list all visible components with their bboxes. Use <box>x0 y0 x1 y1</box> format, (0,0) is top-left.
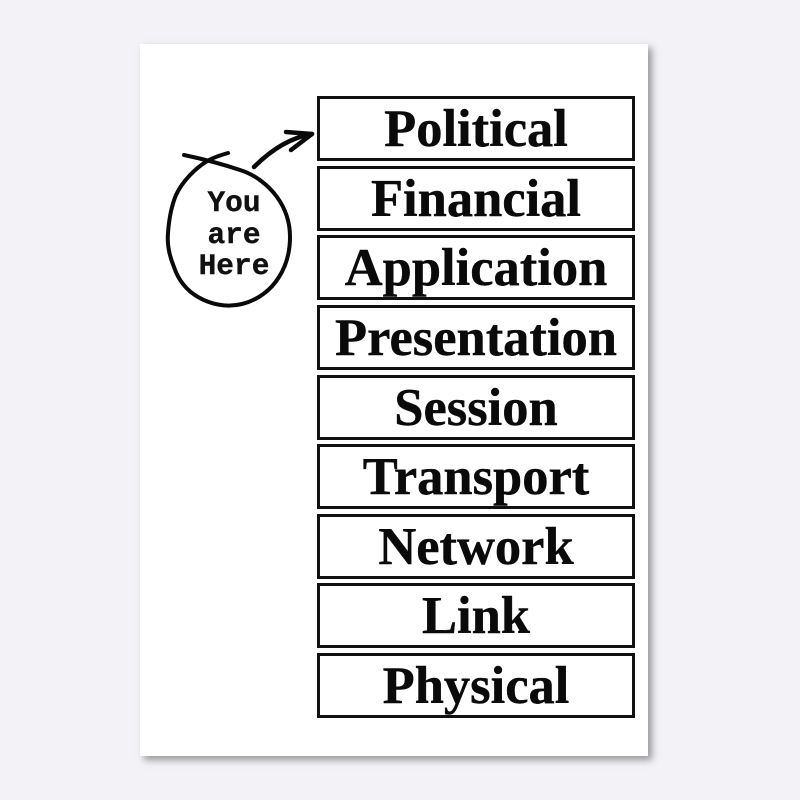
poster card <box>140 44 648 756</box>
icon: hand-drawn circle <box>168 153 290 306</box>
layer box: Financial: Financial <box>371 170 581 228</box>
layer box: Link: Link <box>422 587 530 645</box>
layer box: Political <box>317 96 635 161</box>
layer box: Presentation: Presentation <box>335 309 617 367</box>
layer box: Network: Network <box>378 518 574 576</box>
layer box: Financial <box>317 166 635 231</box>
layer box: Physical <box>317 653 635 718</box>
layer box: Session: Session <box>394 379 558 437</box>
layer box: Application: Application <box>345 239 607 297</box>
layer box: Session <box>317 375 635 440</box>
layer box: Physical: Physical <box>383 657 569 715</box>
layer box: Transport <box>317 444 635 509</box>
label: You are Here <box>199 186 269 283</box>
arrow to Political box <box>254 132 312 167</box>
label: You are Here: Here <box>199 249 269 283</box>
layer box: Transport: Transport <box>363 448 589 506</box>
label: You are Here: are <box>207 218 261 252</box>
layer box: Link <box>317 583 635 648</box>
label: You are Here: You <box>207 186 261 220</box>
layer box: Political: Political <box>384 100 568 158</box>
layer box: Network <box>317 514 635 579</box>
